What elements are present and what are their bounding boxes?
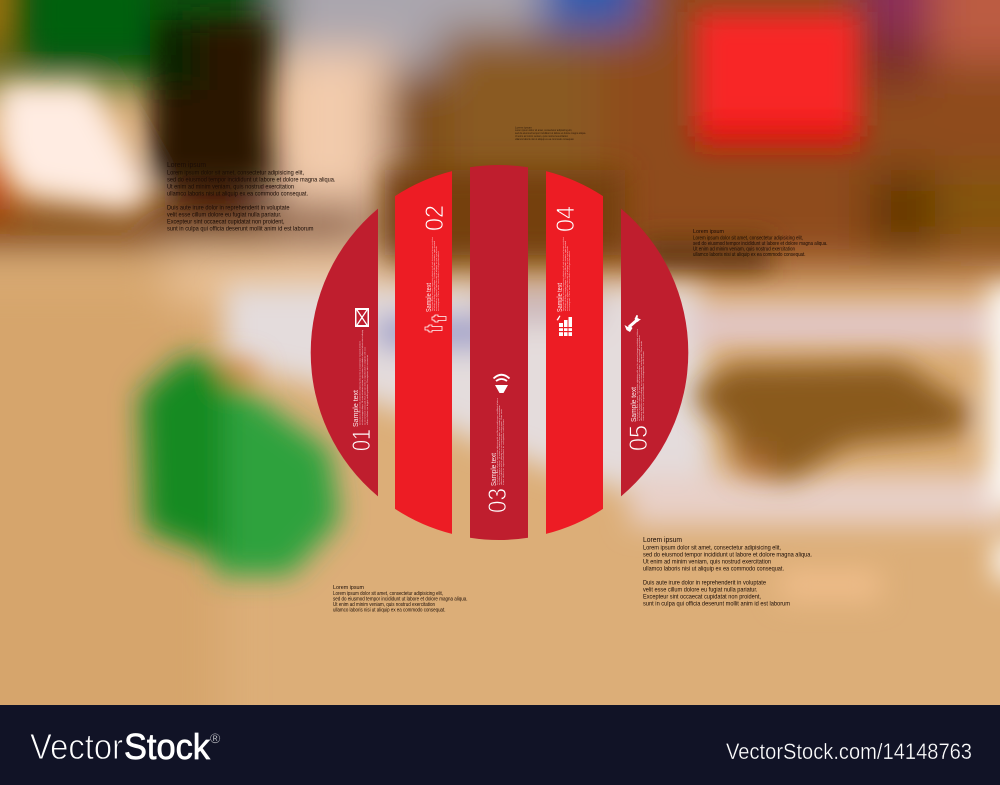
text block: upper left: velit esse cillum dolore eu fugiat nulla pariatur. bbox=[167, 212, 282, 218]
text block: lower right: Excepteur sint occaecat cupidatat non proident, bbox=[643, 594, 761, 600]
text block: lower centre: Lorem ipsum bbox=[333, 585, 364, 591]
text block: right: Ut enim ad minim veniam, quis nostrud exercitation bbox=[693, 246, 795, 252]
text block: top centre: sed do eiusmod tempor incididunt ut labore et dolore magna aliqua. bbox=[515, 131, 586, 135]
heading: sample text 01: Sample text bbox=[351, 390, 360, 427]
image id: VectorStock.com/14148763 bbox=[726, 739, 972, 764]
number 05: 05 bbox=[625, 425, 653, 451]
text block: lower centre: sed do eiusmod tempor incididunt ut labore et dolore magna aliqua. bbox=[333, 596, 468, 602]
text block 04: Lorem ipsum dolor sit amet, consectetur adipisicing elit, sed do eiusmod tempor incididunt bbox=[562, 237, 565, 311]
icon: wrench bbox=[624, 315, 641, 332]
heading: sample text 03: Sample text bbox=[489, 453, 498, 486]
text block: upper left: Ut enim ad minim veniam, quis nostrud exercitation bbox=[167, 184, 295, 190]
text block: lower right: velit esse cillum dolore eu fugiat nulla pariatur. bbox=[643, 586, 758, 594]
text block: upper left: ullamco laboris nisi ut aliquip ex ea commodo consequat. bbox=[167, 190, 308, 198]
text block: upper left: Excepteur sint occaecat cupidatat non proident, bbox=[167, 218, 285, 226]
text block: upper left: Lorem ipsum bbox=[167, 162, 206, 169]
text block: upper left: Lorem ipsum dolor sit amet, consectetur adipisicing elit, bbox=[167, 170, 304, 176]
circle of five vertical strips bbox=[311, 165, 688, 540]
text block: right: sed do eiusmod tempor incididunt ut labore et dolore magna aliqua. bbox=[693, 241, 828, 247]
text block: lower centre: Lorem ipsum dolor sit amet, consectetur adipisicing elit, bbox=[333, 591, 443, 597]
text block 02: Lorem ipsum dolor sit amet, consectetur adipisicing elit, sed do eiusmod tempor incididunt bbox=[431, 237, 434, 311]
text block 01: et dolore magna aliqua. Ut enim ad minim veniam, quis nostrud exercitation ullamco laboris nisi ut aliquip bbox=[361, 329, 364, 425]
text block 05: et dolore magna aliqua. Ut enim ad minim veniam, quis nostrud exercitation bbox=[638, 334, 641, 421]
panel: strip 05 bbox=[621, 209, 688, 496]
heading: sample text 04: Sample text bbox=[555, 283, 564, 312]
text block 04: ut labore et dolore magna aliqua. Ut enim ad minim veniam, quis nostrud bbox=[564, 240, 567, 311]
text block 03: ullamco laboris nisi ut aliquip ex ea commodo consequat. Duis aute bbox=[500, 408, 503, 485]
text block: upper left: sunt in culpa qui officia deserunt mollit anim id est laborum bbox=[167, 226, 314, 232]
text block 01: ex ea commodo consequat. Duis aute irure dolor in reprehenderit in voluptate velit esse bbox=[364, 346, 366, 425]
panel: strip 03 bbox=[470, 165, 528, 540]
text block: top centre: Lorem ipsum bbox=[515, 126, 532, 130]
text block: lower right: Ut enim ad minim veniam, quis nostrud exercitation bbox=[643, 558, 772, 566]
text block: right bbox=[693, 229, 828, 258]
text block 02 bbox=[431, 237, 440, 311]
panel: strip 01 bbox=[311, 209, 378, 496]
icon: envelope bbox=[355, 308, 369, 327]
text block: lower centre: ullamco laboris nisi ut aliquip ex ea commodo consequat. bbox=[333, 608, 446, 614]
number 04: 04 bbox=[552, 206, 580, 232]
text block: top centre bbox=[515, 126, 586, 141]
text block: lower right: Duis aute irure dolor in reprehenderit in voluptate bbox=[643, 580, 767, 586]
number 02: 02 bbox=[421, 205, 449, 231]
text block 03: et dolore magna aliqua. Ut enim ad minim veniam, quis nostrud exercitation bbox=[498, 404, 501, 485]
text block 03 bbox=[496, 397, 505, 485]
logo: Vector: Vector bbox=[30, 726, 123, 767]
text block: upper left: sed do eiusmod tempor incididunt ut labore et dolore magna aliqua. bbox=[167, 176, 336, 184]
text block: upper left bbox=[167, 162, 336, 232]
panel: strip 02 bbox=[395, 171, 452, 534]
text block 05: Lorem ipsum dolor sit amet, consectetur adipisicing elit, sed do eiusmod tempor incididunt ut labore bbox=[636, 328, 639, 421]
text block: right: Lorem ipsum dolor sit amet, consectetur adipisicing elit, bbox=[693, 236, 803, 242]
panel: strip 04 bbox=[546, 171, 603, 534]
text block: lower centre: Ut enim ad minim veniam, quis nostrud exercitation bbox=[333, 602, 435, 608]
text block 01: Lorem ipsum dolor sit amet, consectetur adipisicing elit, sed do eiusmod tempor incididunt ut labore bbox=[358, 340, 362, 425]
heading: sample text 05: Sample text bbox=[629, 387, 638, 422]
text block 04: exercitation ullamco laboris nisi ut aliquip ex ea commodo bbox=[566, 245, 569, 311]
icon: two bottles bbox=[425, 315, 446, 332]
number 01: 01 bbox=[348, 429, 376, 451]
text block 04 bbox=[562, 237, 571, 311]
text block: top centre: ullamco laboris nisi ut aliquip ex ea commodo consequat. bbox=[515, 137, 574, 141]
icon: signal lamp bbox=[494, 375, 510, 393]
text block 05: ullamco laboris nisi ut aliquip ex ea commodo consequat. Duis aute bbox=[640, 340, 643, 421]
text block: right: ullamco laboris nisi ut aliquip ex ea commodo consequat. bbox=[693, 252, 806, 258]
footer banner bbox=[0, 705, 1000, 785]
text block: lower centre bbox=[333, 585, 468, 614]
text block: lower right: sed do eiusmod tempor incididunt ut labore et dolore magna aliqua. bbox=[643, 552, 812, 558]
text block: right: Lorem ipsum bbox=[693, 229, 724, 235]
text block: lower right: ullamco laboris nisi ut aliquip ex ea commodo consequat. bbox=[643, 566, 784, 572]
logo: Stock: Stock bbox=[124, 726, 211, 767]
text block: top centre: Lorem ipsum dolor sit amet, consectetur adipisicing elit, bbox=[515, 128, 572, 132]
text block 02: exercitation ullamco laboris nisi ut aliquip ex ea commodo bbox=[435, 245, 438, 311]
text block 04: consequat. Duis aute irure dolor in reprehenderit bbox=[568, 250, 571, 311]
heading: sample text 02: Sample text bbox=[424, 283, 433, 312]
text block 03: irure dolor in reprehenderit in voluptate velit esse bbox=[502, 418, 505, 485]
icon: bar chart bbox=[556, 316, 573, 336]
logo: registered mark: ® bbox=[210, 730, 221, 746]
text block: lower right: Lorem ipsum bbox=[643, 537, 682, 544]
text block: lower right bbox=[643, 537, 812, 608]
number 03: 03 bbox=[484, 488, 512, 513]
text block 05: irure dolor in reprehenderit in voluptate velit esse bbox=[642, 350, 645, 421]
text block: top centre: Ut enim ad minim veniam, quis nostrud exercitation bbox=[515, 134, 568, 138]
text block 01: cillum dolore eu fugiat nulla pariatur. Excepteur sint occaecat bbox=[366, 355, 369, 425]
text block 01 bbox=[358, 329, 369, 425]
text block 02: consequat. Duis aute irure dolor in reprehenderit bbox=[437, 250, 440, 311]
text block 05 bbox=[636, 328, 645, 421]
text block 02: ut labore et dolore magna aliqua. Ut enim ad minim veniam, quis nostrud bbox=[433, 240, 436, 311]
text block 03: Lorem ipsum dolor sit amet, consectetur adipisicing elit, sed do eiusmod tempor incididunt ut labore bbox=[496, 397, 499, 485]
text block: upper left: Duis aute irure dolor in reprehenderit in voluptate bbox=[167, 204, 290, 212]
text block: lower right: sunt in culpa qui officia deserunt mollit anim id est laborum bbox=[643, 600, 790, 608]
text block: lower right: Lorem ipsum dolor sit amet, consectetur adipisicing elit, bbox=[643, 544, 781, 552]
